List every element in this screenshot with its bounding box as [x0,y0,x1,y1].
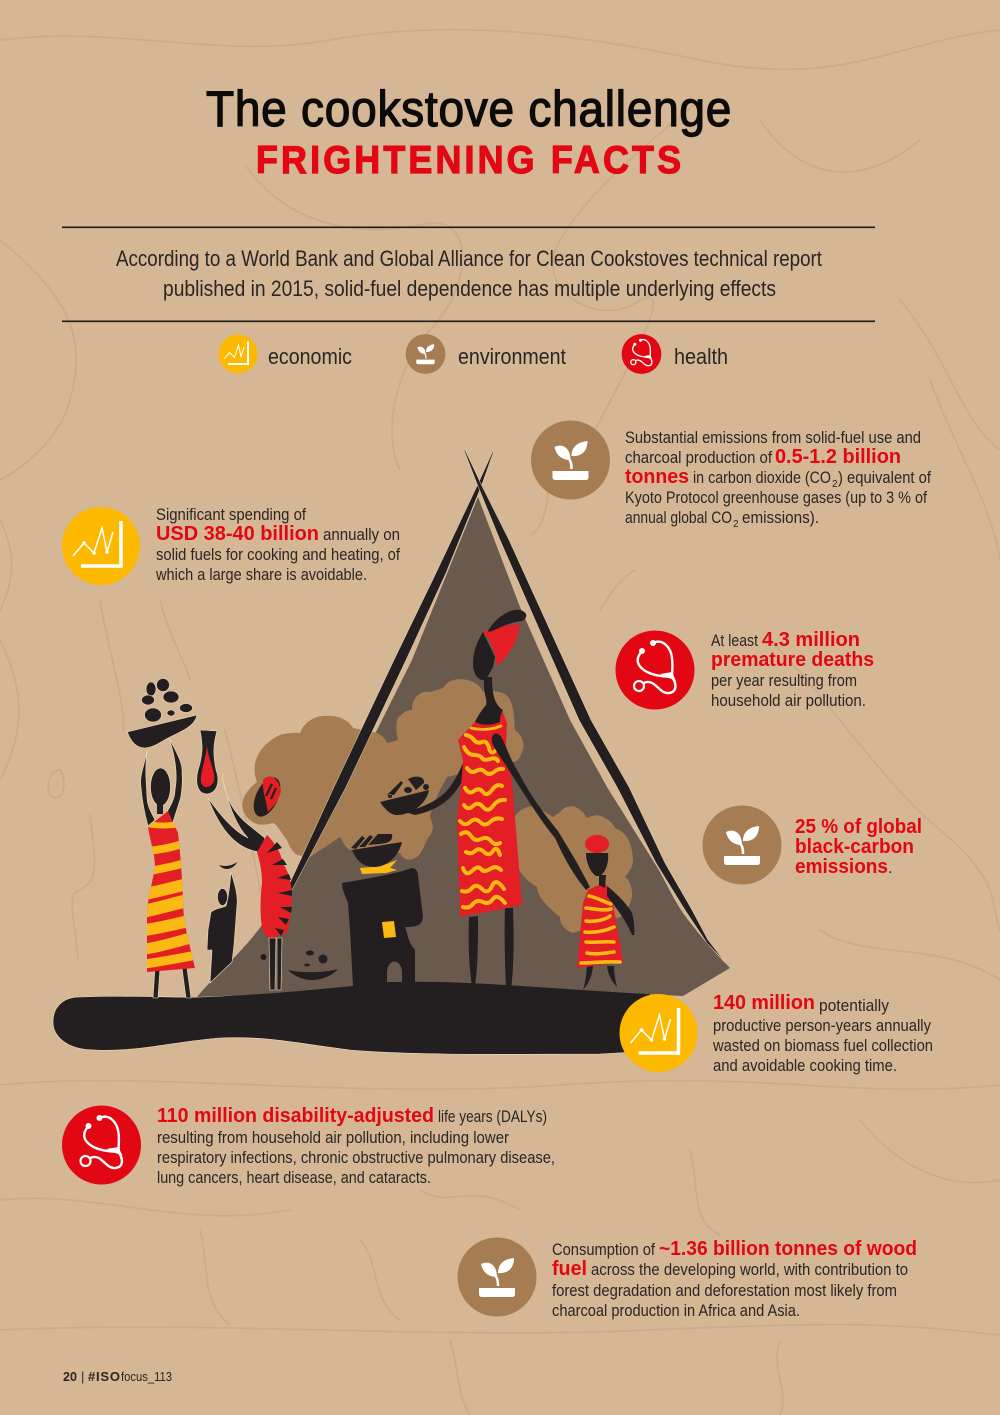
text: deaths [711,628,874,710]
text: DALYs [157,1104,555,1187]
text: deaths: 4.3 million [762,628,860,651]
text: emissions: annual global CO [625,509,732,527]
smoke clouds [242,679,633,933]
text: emissions: tonnes [625,465,689,488]
footer: | [81,1369,84,1384]
text: person-years: and avoidable cooking time. [713,1057,897,1075]
fact: economic spending [62,506,400,585]
text: person-years: wasted on biomass fuel collection [712,1037,933,1055]
text: emissions: 2 [832,479,838,490]
footer: focus_113 [121,1369,172,1384]
text: wood fuel: ~1.36 billion tonnes of wood [659,1237,917,1260]
tent body [197,497,730,997]
text: spending: annually on [323,526,400,544]
text: person-years: productive person-years annually [713,1017,932,1035]
text: emissions [625,429,931,530]
legend label: economic: economic [268,344,352,369]
text: emissions: in carbon dioxide (CO [693,469,831,487]
text: spending: which a large share is avoidable. [155,566,367,584]
child [577,835,634,990]
text: black carbon: emissions [795,855,888,878]
vase [197,730,218,794]
text: emissions: ) equivalent of [838,469,931,487]
text: wood fuel [552,1237,917,1320]
text: wood fuel: Consumption of [552,1241,655,1259]
text: DALYs: 110 million disability-adjusted [157,1104,434,1127]
text: DALYs: resulting from household air pollution, including lower [157,1129,509,1147]
fact: black carbon [702,806,922,884]
icon: plant [458,1238,536,1316]
text: black carbon [795,815,922,878]
ground bowl and stones [260,950,338,980]
icon: stethoscope [616,630,694,710]
woman with vase [208,773,292,990]
icon: chart [620,994,698,1072]
text: emissions: charcoal production of [625,449,772,467]
footer [63,1369,172,1384]
text: deaths: premature deaths [711,648,874,671]
text: spending: Significant spending of [156,506,306,524]
text: wood fuel: forest degradation and deforestation most likely from [552,1282,897,1300]
legend icon: economic [218,334,258,374]
text: person-years [712,991,933,1075]
intro text [116,246,823,301]
text: DALYs: life years (DALYs) [438,1108,547,1126]
text: emissions: Substantial emissions from solid-fuel use and [625,429,921,447]
text: spending: solid fuels for cooking and heating, of [156,546,400,564]
legend label: health: health [674,344,728,369]
icon: stethoscope [62,1106,141,1184]
footer: 20 [63,1369,77,1384]
icon: chart [62,507,140,585]
fact: premature deaths [616,628,874,710]
tent poles [289,450,725,962]
intro text: published in 2015, solid-fuel dependence has multiple underlying effects [163,276,776,301]
footer: #ISO [88,1369,120,1384]
icon: plant [531,420,610,500]
legend [218,334,728,374]
text: emissions: emissions). [742,509,819,527]
fact: wood fuel [458,1237,917,1320]
text: emissions: Kyoto Protocol greenhouse gases (up to 3 % of [625,489,927,507]
legend icon: environment [406,334,445,374]
fact: environment emissions [531,420,931,530]
woman with bowl on head [127,678,197,998]
subtitle: FRIGHTENING FACTS [256,138,681,181]
text: emissions: 2 [733,519,739,530]
intro text: According to a World Bank and Global Alliance for Clean Cookstoves technical report [116,246,823,271]
fact: DALYs [62,1104,555,1187]
text: person-years: 140 million [713,991,815,1014]
fact: person-years [620,991,933,1075]
text: deaths: per year resulting from [711,672,857,690]
icon: plant [702,806,782,884]
legend icon: health [622,334,661,374]
ground [53,981,670,1054]
illustration: tent scene [53,450,730,1054]
text: DALYs: lung cancers, heart disease, and cataracts. [157,1169,431,1187]
legend label: environment: environment [458,344,567,369]
title: The cookstove challenge [206,82,731,137]
text: spending: USD 38-40 billion [156,522,319,545]
small background figure [207,862,237,983]
text: wood fuel: across the developing world, with contribution to [591,1261,908,1279]
text: wood fuel: fuel [552,1257,587,1280]
cooking stove [342,834,423,986]
woman with bowl and child [380,610,634,990]
text: wood fuel: charcoal production in Africa and Asia. [552,1302,800,1320]
text: deaths: household air pollution. [711,692,866,710]
text: DALYs: respiratory infections, chronic obstructive pulmonary disease, [157,1149,555,1167]
text: deaths: At least [711,632,758,650]
text: black carbon: . [888,859,893,877]
text: black carbon: black-carbon [795,835,914,858]
text: emissions: 0.5-1.2 billion [775,445,901,468]
text: person-years: potentially [819,997,890,1015]
text: black carbon: 25 % of global [795,815,922,838]
text: spending [155,506,400,584]
